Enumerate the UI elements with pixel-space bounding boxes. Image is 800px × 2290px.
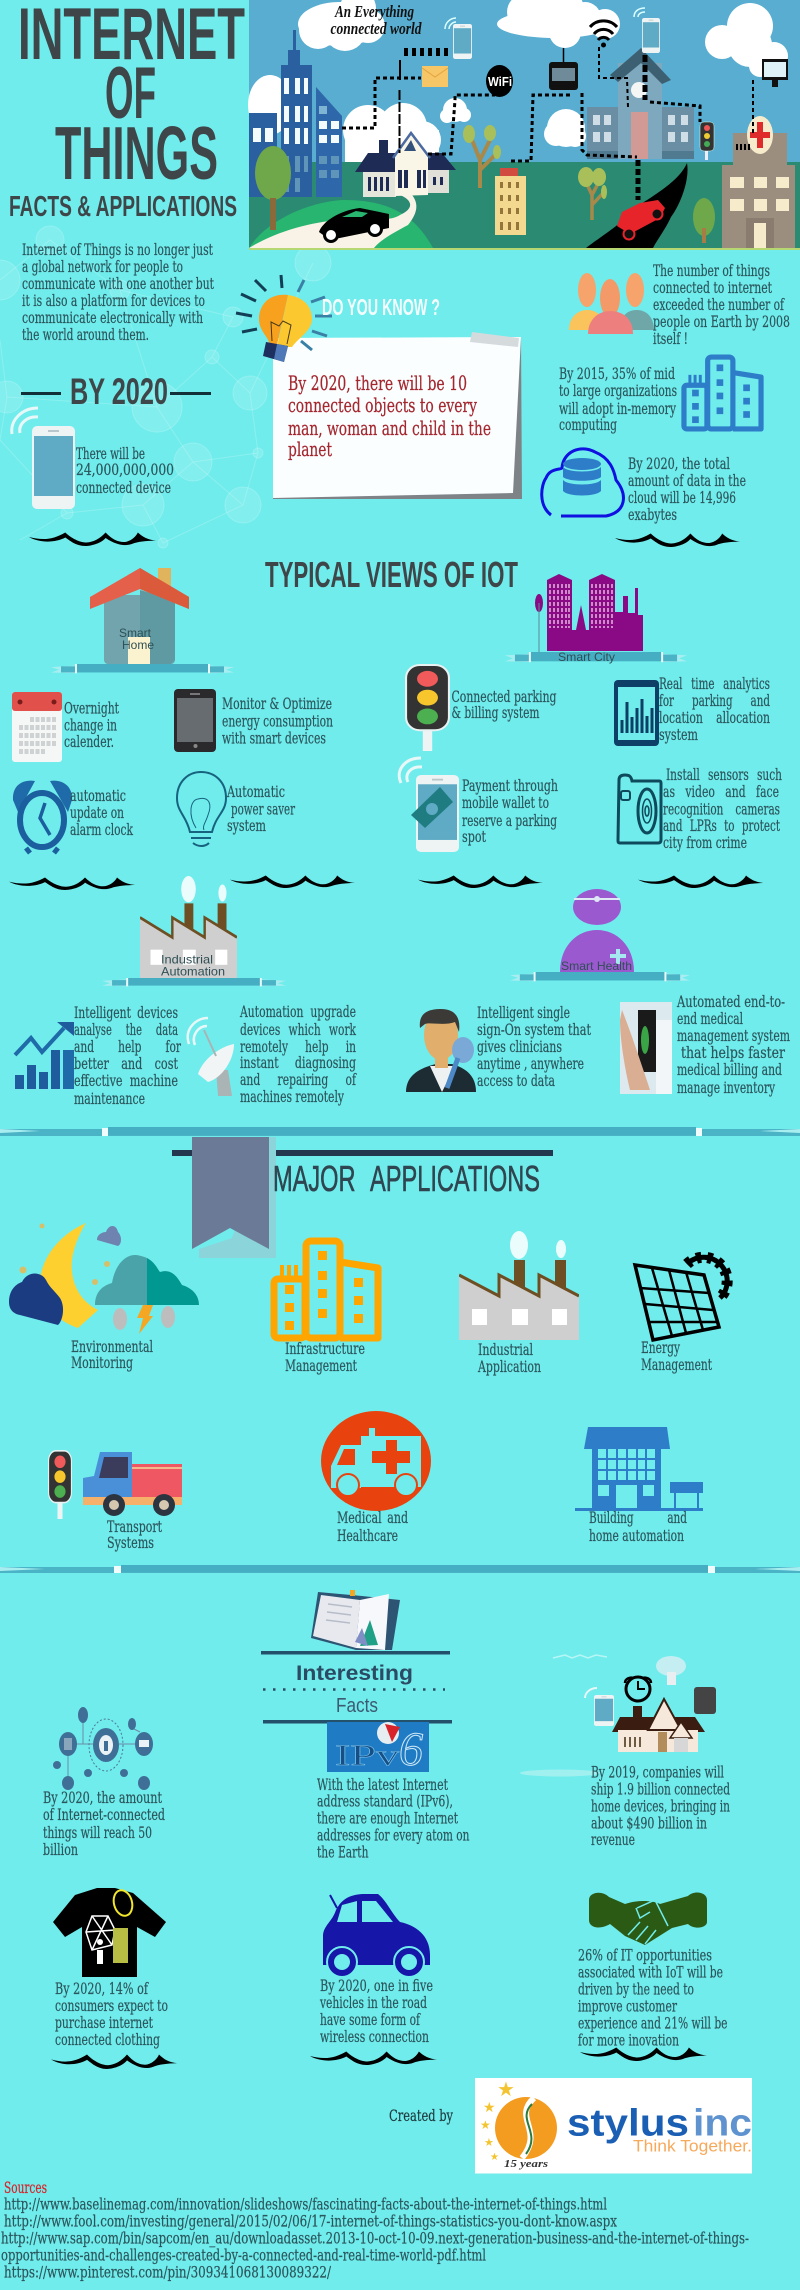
panel: smart health: Smart Health: [561, 959, 632, 973]
text: energy: energy consumption: [222, 712, 333, 730]
text: payment: Payment through: [462, 777, 558, 795]
icon: building automation: [575, 1427, 703, 1511]
background network pattern: [0, 226, 331, 548]
intro text: it is also a platform for devices to: [22, 292, 205, 310]
icon: open book: [311, 1590, 400, 1650]
sources: Sources: [4, 2179, 47, 2197]
text: clothing: consumers expect to: [55, 1997, 168, 2015]
wave divider: [51, 2055, 177, 2069]
title: [9, 0, 245, 223]
icon: connected phone: [12, 408, 75, 509]
text: energy: Monitor & Optimize: [222, 695, 332, 713]
text: automation upgrade: [239, 1003, 357, 1106]
text: cloud data: cloud will be 14,996: [628, 489, 736, 507]
text: vehicles: By 2020, one in five: [320, 1977, 433, 1995]
logo: stylusinc: ★: [483, 2100, 496, 2116]
text: parking: Connected parking: [452, 688, 557, 706]
header illustration: connected city: connected world: [330, 19, 422, 38]
text: calendar: [64, 700, 120, 751]
icon: smartphone: [174, 689, 216, 752]
icon: iot network: [53, 1707, 153, 1790]
intro text: a global network for people to: [22, 258, 183, 276]
icon: smart t-shirt: [53, 1888, 166, 1977]
label: transport: Transport: [107, 1518, 163, 1536]
text: sensors: city from crime: [663, 834, 747, 852]
text: intelligent devices: and help for: [74, 1038, 181, 1056]
sources: http://www.baselinemag.com/innovation/slideshows/fascinating-facts-about-the-internet-of-things.html: [4, 2196, 607, 2214]
text: alarm: alarm clock: [70, 821, 133, 839]
label: building: Building and: [589, 1509, 687, 1527]
text: energy: with smart devices: [222, 730, 326, 748]
text: in-memory computing: will adopt in-memory: [559, 400, 676, 418]
text: ipv6: [317, 1776, 470, 1861]
text: single sign-on: access to data: [477, 1072, 555, 1090]
sources: [1, 2179, 749, 2282]
text: home devices: revenue: [591, 1831, 635, 1849]
icon: traffic light: [406, 665, 449, 751]
wave divider: [580, 2048, 707, 2061]
callout: sticky note: By 2020, there will be 10: [288, 371, 467, 395]
wave divider: [310, 2052, 437, 2065]
wave divider: [29, 532, 156, 546]
icon: environmental monitoring: [9, 1223, 199, 1334]
label: energy: [641, 1339, 713, 1374]
logo: stylusinc: stylus: [567, 2102, 689, 2144]
text: intelligent devices: better and cost: [74, 1055, 179, 1073]
text: home devices: By 2019, companies will: [591, 1764, 724, 1782]
text: power saver: system: [227, 817, 266, 835]
panel: smart home: Smart: [119, 626, 152, 640]
panel: industrial automation: Automation: [161, 964, 225, 978]
text: ipv6: the Earth: [317, 1843, 369, 1861]
label: environmental: [71, 1338, 153, 1372]
title: OF: [105, 53, 156, 134]
text: payment: [462, 777, 558, 846]
text: it opportunities: for more inovation: [578, 2031, 679, 2049]
text: cloud data: By 2020, the total: [628, 455, 730, 473]
logo: stylusinc: inc: [693, 2102, 752, 2144]
text: it opportunities: 26% of IT opportunities: [578, 1946, 712, 1964]
icon: satellite dish: [188, 1018, 234, 1096]
label: building: home automation: [589, 1527, 684, 1545]
text: vehicles: [319, 1977, 433, 2046]
created by: Created by: [389, 2107, 453, 2125]
text: it opportunities: experience and 21% will be: [578, 2014, 728, 2032]
text: 50 billion: By 2020, the amount: [43, 1789, 163, 1807]
heading: interesting facts: Facts: [336, 1695, 378, 1717]
wave divider: [230, 875, 355, 888]
panel: smart city: Smart City: [558, 650, 615, 664]
icon: growth chart: [15, 1022, 74, 1089]
text: in-memory computing: By 2015, 35% of mid: [559, 365, 675, 383]
text: 50 billion: billion: [43, 1841, 78, 1859]
logo: stylusinc: 15 years: [504, 2159, 548, 2170]
label: industrial: Application: [477, 1358, 541, 1376]
text: alarm: [70, 787, 133, 839]
label: infrastructure: Management: [285, 1357, 358, 1375]
icon: outline bulb: [177, 772, 226, 846]
heading: by 2020: BY 2020: [70, 371, 168, 412]
text: intelligent devices: effective machine: [74, 1072, 178, 1090]
panel: industrial automation: Industrial: [161, 952, 213, 966]
panel: smart home: [51, 568, 234, 673]
intro text: Internet of Things is no longer just: [22, 241, 214, 259]
icon: solar panel: [635, 1257, 727, 1340]
logo: stylusinc: ★: [490, 2152, 499, 2163]
text: it opportunities: driven by the need to: [578, 1980, 694, 1998]
heading: typical views: TYPICAL VIEWS OF IOT: [265, 554, 518, 595]
icon: infrastructure: [274, 1241, 378, 1338]
text: single sign-on: sign-On system that: [477, 1021, 592, 1039]
logo: stylusinc: ★: [480, 2118, 491, 2132]
callout: sticky note: [273, 332, 522, 499]
sources: opportunities-and-challenges-created-by-a-connected-and-real-time-world-pdf.html: [1, 2246, 486, 2264]
icon: blue buildings: [684, 357, 761, 429]
text: parking: [452, 688, 557, 722]
text: home devices: ship 1.9 billion connected: [591, 1780, 730, 1798]
icon: ipv6 badge: [327, 1722, 429, 1776]
text: clothing: purchase internet: [55, 2014, 154, 2032]
intro text: the world around them.: [22, 326, 149, 344]
icon: camera: [618, 775, 661, 843]
label: environmental: Environmental: [71, 1338, 153, 1356]
text: connected devices: There will be: [76, 445, 145, 463]
text: cloud data: exabytes: [628, 506, 677, 524]
text: clothing: connected clothing: [55, 2031, 160, 2049]
label: energy: Management: [641, 1356, 713, 1374]
text: single sign-on: Intelligent single: [477, 1004, 570, 1022]
decorative faint wave: [553, 1655, 607, 1658]
label: industrial: [477, 1341, 541, 1376]
label: medical: [337, 1509, 408, 1545]
text: home devices: [591, 1764, 730, 1849]
panel: smart city: [505, 574, 687, 664]
title: FACTS & APPLICATIONS: [9, 191, 237, 223]
wave divider: [9, 877, 135, 890]
text: calendar: calender.: [64, 733, 114, 751]
text: home devices: home devices, bringing in: [591, 1797, 730, 1815]
heading: major applications: [172, 1137, 553, 1258]
label: environmental: Monitoring: [71, 1354, 133, 1372]
panel: industrial automation: [102, 876, 286, 986]
callout: sticky note: man, woman and child in the: [288, 416, 491, 440]
panel: smart home: Home: [122, 638, 154, 652]
intro text: communicate electronically with: [22, 309, 203, 327]
logo: stylusinc: [475, 2077, 752, 2174]
text: connected devices: [76, 445, 174, 497]
icon: medical photo: [620, 1002, 672, 1094]
icon: handshake: [589, 1893, 707, 1945]
heading: major applications: MAJOR APPLICATIONS: [273, 1158, 540, 1199]
logo: stylusinc: ★: [484, 2136, 494, 2149]
icon: smart home devices: [585, 1656, 716, 1752]
wave divider: [638, 875, 764, 888]
text: payment: spot: [462, 828, 487, 846]
text: number of things: [653, 262, 790, 348]
icon: calendar: [12, 692, 62, 762]
text: automation upgrade: and repairing of: [240, 1071, 357, 1089]
heading: interesting facts: Interesting: [296, 1662, 413, 1685]
text: in-memory computing: [559, 365, 677, 434]
text: alarm: automatic: [70, 787, 126, 805]
icon: light bulb: [236, 275, 332, 362]
icon: analytics tablet: [614, 680, 659, 746]
text: single sign-on: [477, 1004, 592, 1090]
text: analytics: system: [659, 726, 698, 744]
text: single sign-on: anytime , anywhere: [477, 1055, 584, 1073]
title: THINGS: [55, 111, 218, 195]
sources: http://www.fool.com/investing/general/2015/02/06/17-internet-of-things-statistics-you-dont-know.aspx: [4, 2213, 617, 2231]
icon: factory: [459, 1231, 579, 1340]
text: intelligent devices: analyse the data: [74, 1021, 178, 1039]
icon: mobile wallet phone: [399, 758, 459, 852]
text: clothing: By 2020, 14% of: [55, 1980, 149, 1998]
section divider ribbon: [0, 1565, 800, 1573]
header illustration: connected city: An Everything: [334, 2, 414, 21]
text: it opportunities: improve customer: [578, 1997, 677, 2015]
label: energy: Energy: [641, 1339, 680, 1357]
label: infrastructure: [285, 1340, 365, 1375]
text: analytics: [659, 675, 770, 744]
wave divider: [615, 534, 740, 547]
heading: interesting facts: [261, 1651, 452, 1724]
text: automation upgrade: instant diagnosing: [240, 1054, 356, 1072]
text: automation upgrade: devices which work: [240, 1021, 356, 1039]
callout: sticky note: connected objects to every: [288, 393, 477, 417]
text: intelligent devices: [74, 1004, 181, 1108]
heading: do you know: DO YOU KNOW ?: [322, 294, 440, 320]
text: home devices: about $490 billion in: [591, 1814, 707, 1832]
text: intelligent devices: maintenance: [74, 1090, 145, 1108]
text: ipv6: With the latest Internet: [317, 1776, 449, 1794]
text: automation upgrade: machines remotely: [240, 1088, 344, 1106]
intro text: communicate with one another but: [22, 275, 215, 293]
text: vehicles: have some form of: [320, 2011, 421, 2029]
text: it opportunities: [578, 1946, 728, 2049]
label: transport: [107, 1518, 163, 1552]
label: infrastructure: Infrastructure: [285, 1340, 365, 1358]
icon: ipv6 badge: 6: [399, 1723, 423, 1776]
icon: people: [569, 273, 654, 334]
text: vehicles: vehicles in the road: [319, 1994, 427, 2012]
text: connected devices: connected device: [76, 479, 171, 497]
text: 50 billion: of Internet-connected: [43, 1806, 165, 1824]
text: power saver: [226, 783, 295, 835]
decorative faint cloud: [520, 1770, 600, 1776]
text: ipv6: address standard (IPv6),: [317, 1792, 453, 1810]
text: calendar: change in: [64, 716, 117, 734]
icon: cloud database: [542, 449, 623, 516]
sources: https://www.pinterest.com/pin/309341068130089322/: [4, 2264, 332, 2282]
text: sensors: [663, 766, 782, 852]
icon: transport truck: [49, 1451, 182, 1519]
text: clothing: [55, 1980, 168, 2049]
icon: ipv6 badge: IPv: [335, 1739, 399, 1772]
panel: smart health: [510, 889, 690, 981]
label: industrial: Industrial: [478, 1341, 533, 1359]
text: automation upgrade: remotely help in: [240, 1038, 356, 1056]
text: it opportunities: associated with IoT will be: [578, 1964, 723, 1982]
text: power saver: Automatic: [226, 783, 285, 801]
text: parking: & billing system: [452, 704, 540, 722]
logo: stylusinc: ★: [497, 2077, 515, 2101]
text: energy: [222, 695, 333, 748]
text: medical management: end medical: [677, 1010, 743, 1028]
icon: clinician with key: [406, 1009, 476, 1092]
text: cloud data: [628, 455, 746, 524]
text: payment: reserve a parking: [462, 812, 557, 830]
label: transport: Systems: [107, 1534, 154, 1552]
label: medical: Medical and: [337, 1509, 408, 1527]
icon: alarm clock: [13, 781, 72, 853]
text: connected devices: 24,000,000,000: [76, 461, 174, 479]
text: single sign-on: gives clinicians: [477, 1038, 562, 1056]
text: 50 billion: [43, 1789, 165, 1859]
text: in-memory computing: computing: [559, 416, 617, 434]
text: automation upgrade: Automation upgrade: [239, 1003, 356, 1021]
text: 50 billion: things will reach 50: [43, 1824, 152, 1842]
icon: ambulance: [321, 1411, 431, 1511]
text: alarm: update on: [70, 804, 124, 822]
text: medical management: [676, 993, 790, 1097]
text: vehicles: wireless connection: [320, 2028, 429, 2046]
text: in-memory computing: to large organizations: [559, 382, 677, 400]
text: number of things: itself !: [653, 330, 688, 348]
text: cloud data: amount of data in the: [628, 472, 746, 490]
text: power saver: power saver: [231, 800, 295, 818]
label: medical: Healthcare: [337, 1527, 398, 1545]
section divider ribbon: [0, 1127, 800, 1136]
text: calendar: Overnight: [64, 700, 120, 718]
text: intelligent devices: Intelligent devices: [74, 1004, 178, 1022]
logo: stylusinc: Think Together.: [633, 2136, 752, 2156]
icon: blue car: [323, 1894, 430, 1977]
header illustration: connected city: WiFi: [488, 74, 512, 89]
text: ipv6: there are enough Internet: [317, 1810, 459, 1828]
intro text: [22, 241, 215, 344]
label: building: [589, 1509, 687, 1545]
header illustration: connected city: [248, 0, 800, 250]
callout: sticky note: planet: [288, 437, 332, 461]
text: ipv6: addresses for every atom on: [317, 1826, 470, 1844]
text: payment: mobile wallet to: [462, 794, 549, 812]
wave divider: [418, 875, 543, 888]
